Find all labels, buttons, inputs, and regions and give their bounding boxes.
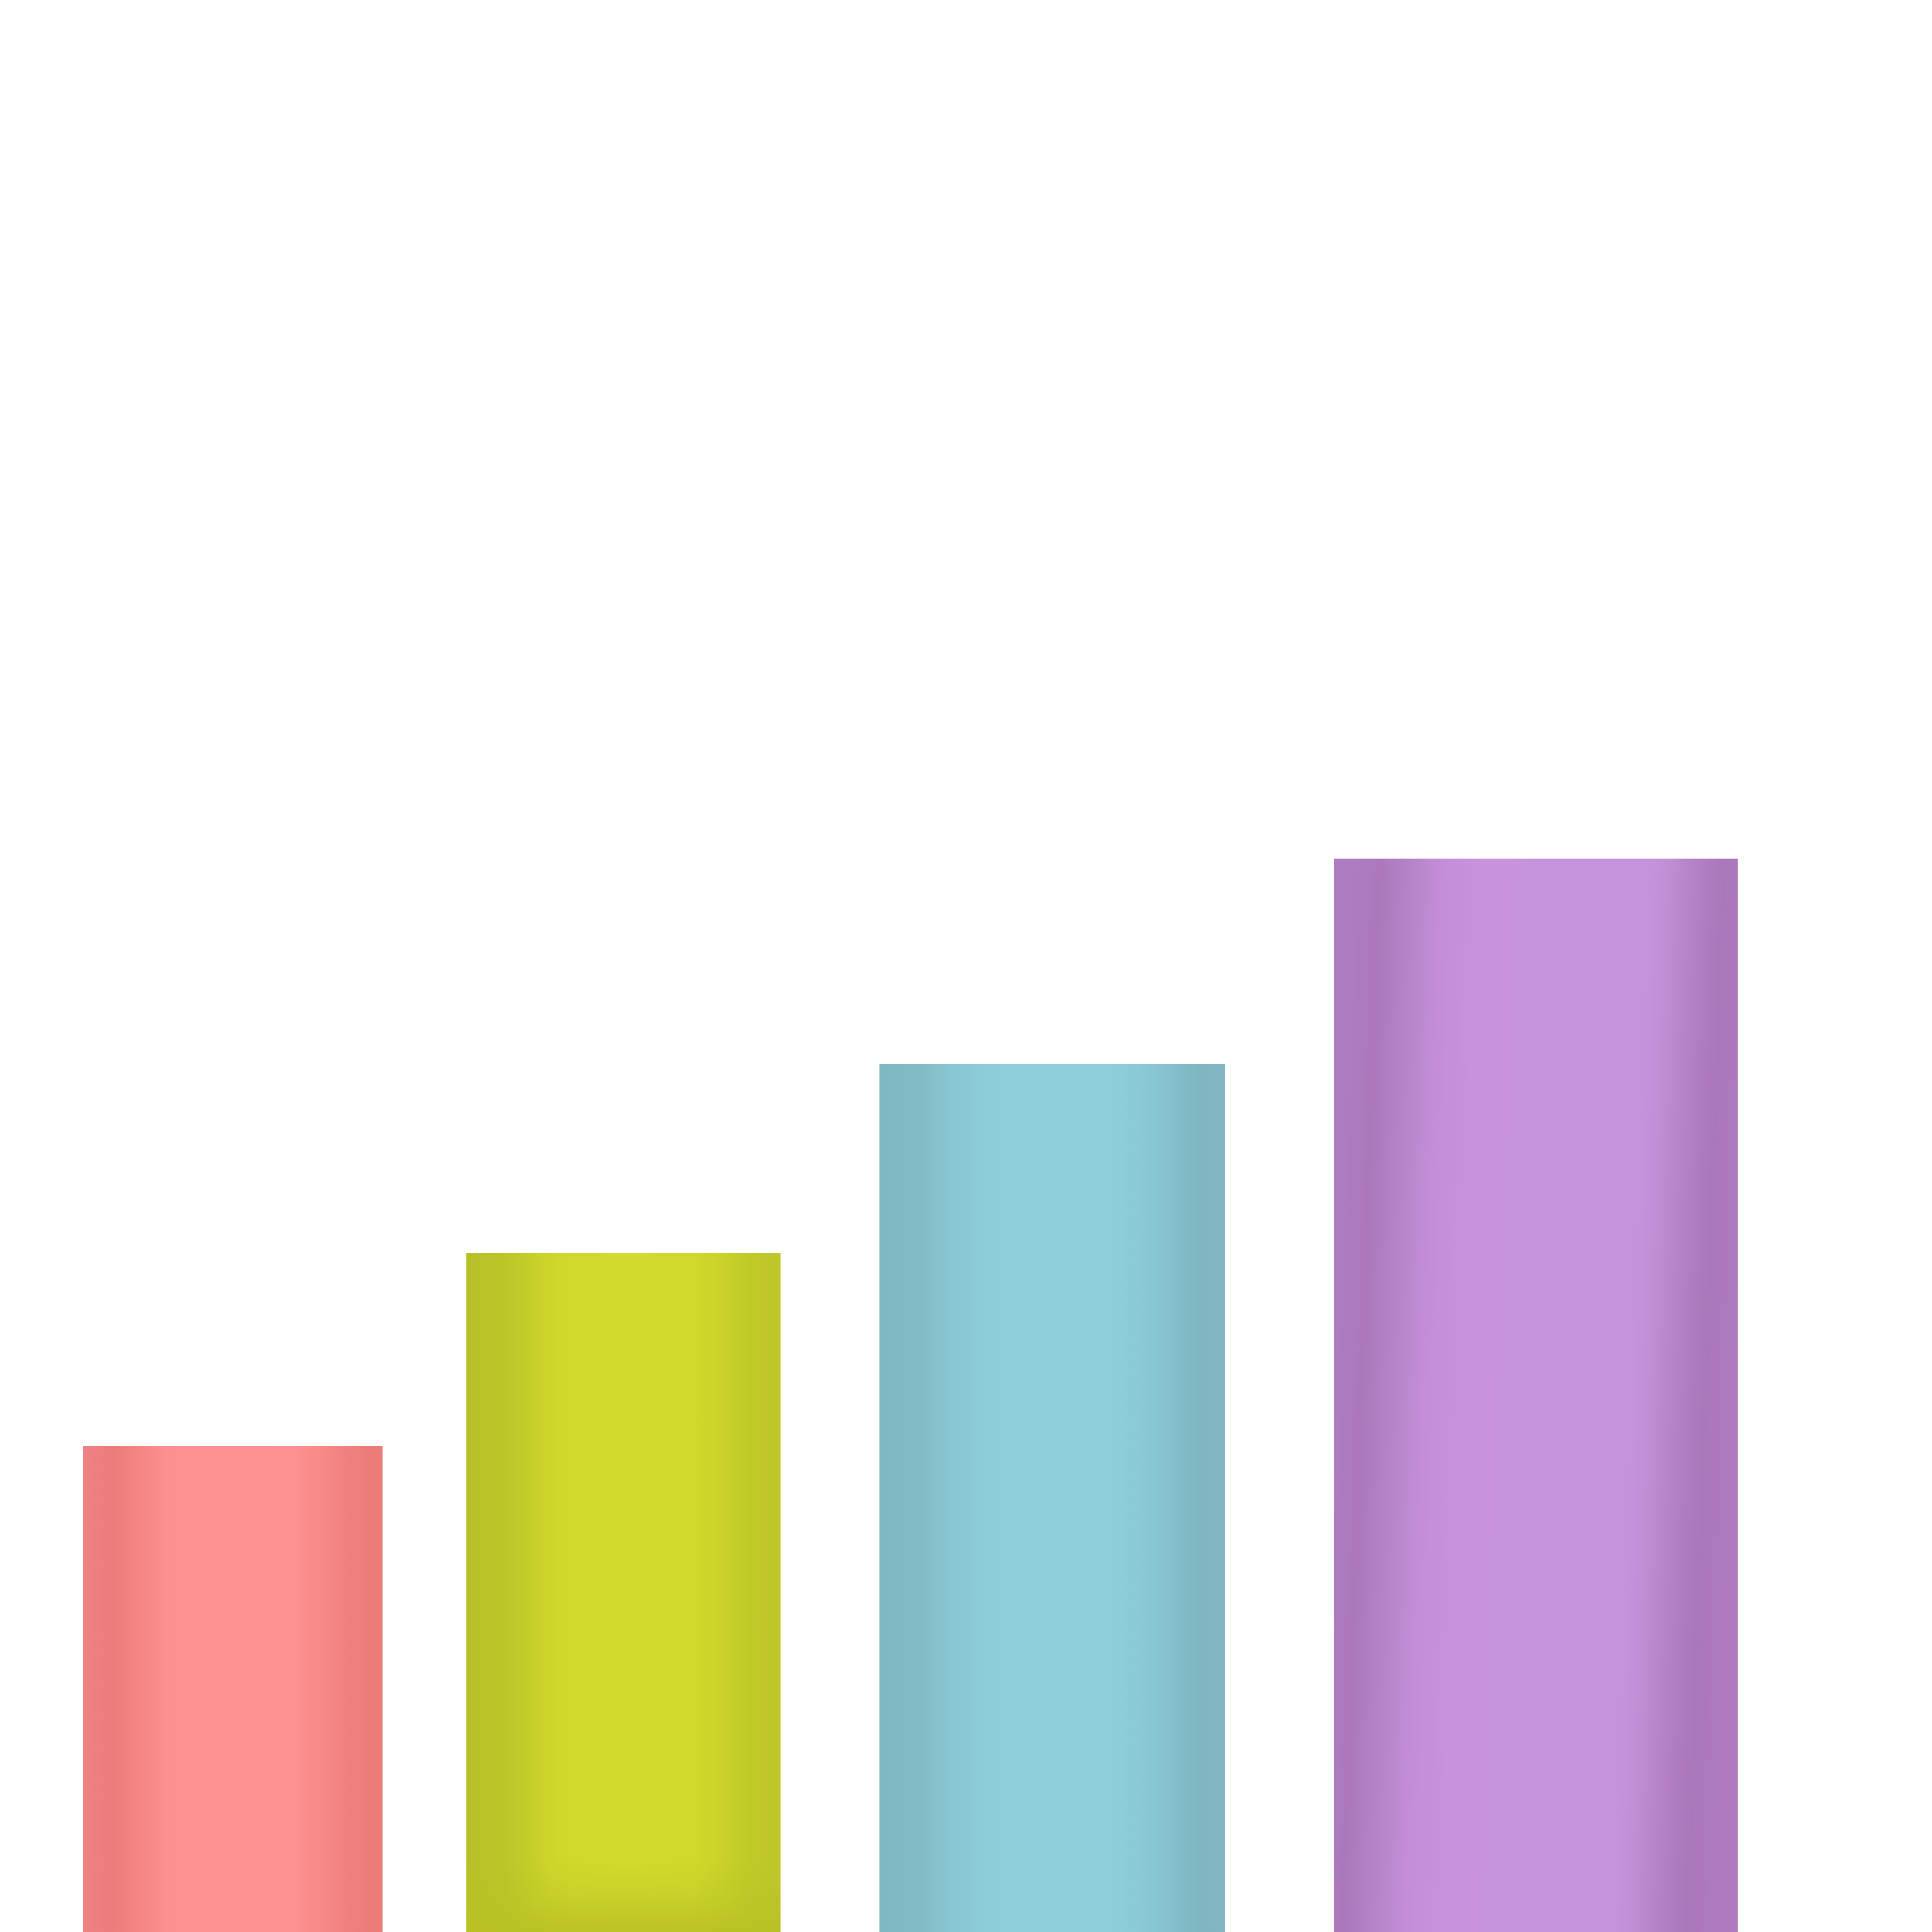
bar 3: teal blue (879, 1064, 1225, 1932)
bar 4: lavender purple (1334, 859, 1738, 1932)
bar 2: lime yellow with darker base (466, 1253, 781, 1932)
bar 1: coral red (83, 1446, 383, 1932)
